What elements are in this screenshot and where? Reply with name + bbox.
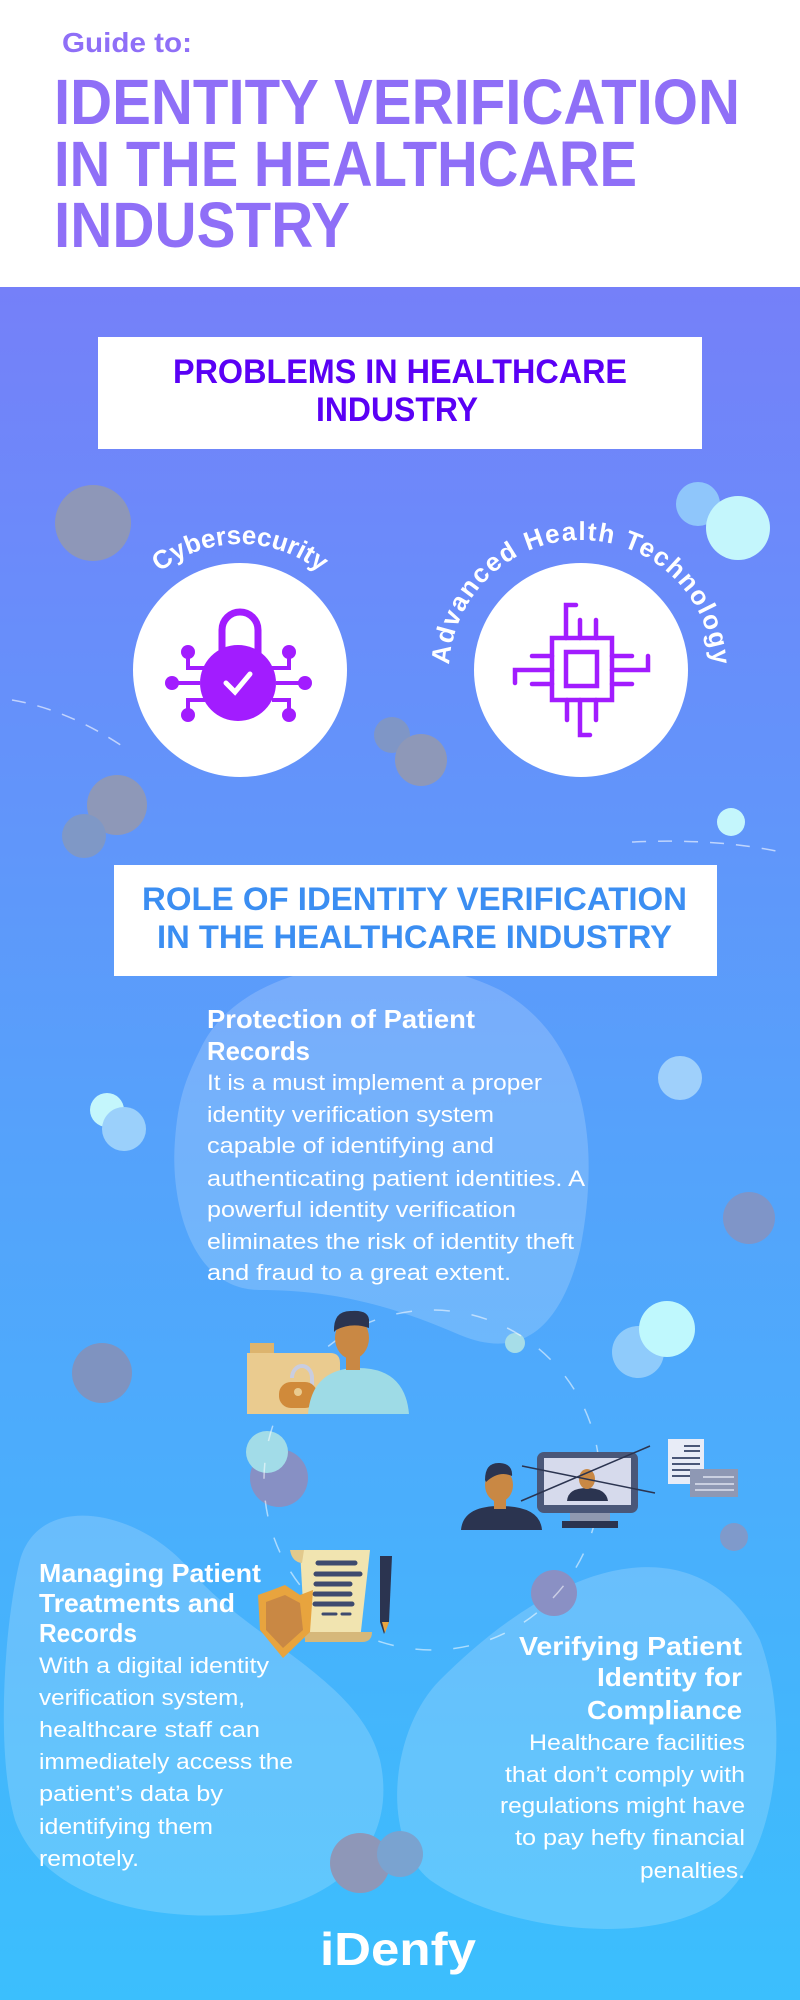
text block: managing patient treatments and records: verification system, [39,1685,245,1710]
blob: managing [4,1516,383,1916]
panel: role heading: IN THE HEALTHCARE INDUSTRY [157,919,672,955]
text block: managing patient treatments and records: Managing Patient [39,1558,261,1588]
text block: verifying patient identity for compliance: Identity for [597,1662,742,1692]
title: INDUSTRY [54,189,350,261]
logo: iDenfy: iDenfy [320,1923,476,1975]
text block: verifying patient identity for compliance: Healthcare facilities [529,1730,745,1755]
label: advanced health technology curved: Advanced Health Technology [432,521,727,664]
panel: role heading [114,865,717,976]
text block: managing patient treatments and records: remotely. [39,1846,139,1871]
text block: verifying patient identity for compliance: to pay hefty financial [515,1825,745,1850]
text block: verifying patient identity for compliance: regulations might have [500,1793,745,1818]
text block: managing patient treatments and records: Treatments and [39,1588,235,1618]
text block: protection of patient records: It is a must implement a proper [207,1070,542,1095]
text block: managing patient treatments and records: immediately access the [39,1749,293,1774]
text block: verifying patient identity for compliance: penalties. [640,1858,745,1883]
text block: protection of patient records: and fraud to a great extent. [207,1260,511,1285]
label: cybersecurity curved: Cybersecurity [153,530,328,572]
text block: managing patient treatments and records: identifying them [39,1814,213,1839]
panel: problems heading [98,337,702,449]
title [54,66,740,261]
illustration: scroll, shield and pen [258,1550,392,1658]
panel: problems heading: INDUSTRY [316,391,478,429]
text block: managing patient treatments and records: With a digital identity [39,1653,269,1678]
panel: cybersecurity [133,530,347,777]
panel: problems heading: PROBLEMS IN HEALTHCARE [173,353,627,391]
text block: protection of patient records: powerful identity verification [207,1197,516,1222]
panel: advanced health technology [432,521,727,777]
text block: protection of patient records: identity verification system [207,1102,494,1127]
illustration: person with locked folder [247,1311,409,1414]
text block: protection of patient records: Protection of Patient [207,1004,475,1034]
text block: protection of patient records: authenticating patient identities. A [207,1166,585,1191]
icon: chip [515,605,648,735]
text block: managing patient treatments and records [39,1558,293,1871]
subtitle: Guide to: Guide to: [62,27,192,58]
text block: verifying patient identity for compliance: that don’t comply with [505,1762,745,1787]
illustration: video identity verification [461,1439,738,1530]
text block: managing patient treatments and records: Records [39,1618,137,1648]
panel: role heading: ROLE OF IDENTITY VERIFICATION [142,881,687,917]
text block: protection of patient records: eliminates the risk of identity theft [207,1229,574,1254]
dashed connector circle [264,1310,600,1650]
title: IN THE HEALTHCARE [54,128,637,200]
text block: protection of patient records: capable of identifying and [207,1133,494,1158]
text block: verifying patient identity for compliance [500,1631,745,1883]
blob: protection [174,963,589,1344]
blob: verifying [397,1567,776,1929]
text block: verifying patient identity for compliance: Verifying Patient [519,1631,742,1661]
text block: managing patient treatments and records: healthcare staff can [39,1717,260,1742]
header background [0,0,800,287]
title: IDENTITY VERIFICATION [54,66,740,138]
text block: managing patient treatments and records: patient’s data by [39,1781,223,1806]
decorative dashed lines [12,700,128,750]
icon: lock network [165,612,312,722]
text block: verifying patient identity for compliance: Compliance [587,1695,742,1725]
text block: protection of patient records [207,1004,585,1285]
decorative circles [55,482,775,1893]
text block: protection of patient records: Records [207,1036,310,1066]
